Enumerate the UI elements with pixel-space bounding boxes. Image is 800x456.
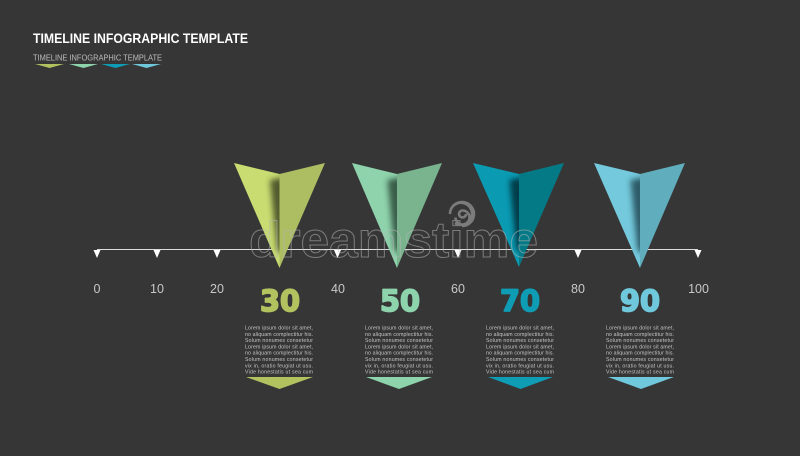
bottom arrow: [246, 377, 313, 389]
column: 70: [486, 284, 554, 389]
lorem text block: Lorem ipsum dolor sit amet,: [486, 326, 554, 332]
lorem text block: Solum nonumes consetetur: [486, 338, 554, 344]
lorem text block: no aliquam complectitur his.: [486, 332, 554, 338]
bottom arrow: [366, 377, 432, 389]
axis labels: 60: [451, 282, 465, 296]
axis labels: 100: [688, 282, 709, 296]
lorem text block: [245, 326, 313, 376]
big number 50: 50: [380, 284, 420, 318]
lorem text block: Vide honestatis ut sea cum: [606, 370, 674, 376]
lorem text block: Lorem ipsum dolor sit amet,: [606, 326, 674, 332]
bottom arrow: [488, 377, 553, 389]
lorem text block: Lorem ipsum dolor sit amet,: [486, 344, 554, 350]
lorem text block: Solum nonumes consetetur: [365, 338, 433, 344]
lorem text block: Solum nonumes consetetur: [365, 357, 433, 363]
lorem text block: Solum nonumes consetetur: [606, 357, 674, 363]
big number 90: 90: [620, 284, 660, 318]
lorem text block: vix in, oratio feugiat ut usu.: [245, 363, 313, 369]
axis labels: 40: [331, 282, 345, 296]
lorem text block: [365, 326, 433, 376]
title: TIMELINE INFOGRAPHIC TEMPLATE: [33, 31, 248, 46]
subtitle colour arrows: [35, 64, 161, 68]
axis labels: 10: [150, 282, 164, 296]
lorem text block: [606, 326, 674, 376]
lorem text block: Solum nonumes consetetur: [245, 357, 313, 363]
subtitle: TIMELINE INFOGRAPHIC TEMPLATE: [33, 52, 162, 62]
lorem text block: no aliquam complectitur his.: [606, 332, 674, 338]
paper plane marker: 50: [352, 163, 442, 268]
lorem text block: no aliquam complectitur his.: [606, 351, 674, 357]
lorem text block: Lorem ipsum dolor sit amet,: [245, 326, 313, 332]
lorem text block: no aliquam complectitur his.: [245, 351, 313, 357]
lorem text block: Vide honestatis ut sea cum: [365, 370, 433, 376]
paper plane marker: 90: [594, 163, 685, 268]
lorem text block: Solum nonumes consetetur: [245, 338, 313, 344]
lorem text block: Lorem ipsum dolor sit amet,: [245, 344, 313, 350]
big number 30: 30: [260, 284, 300, 318]
paper plane marker: 70: [473, 163, 564, 267]
watermark: dreamstime: [249, 212, 538, 268]
header: [33, 31, 248, 68]
lorem text block: no aliquam complectitur his.: [365, 332, 433, 338]
lorem text block: Lorem ipsum dolor sit amet,: [365, 326, 433, 332]
column: 50: [365, 284, 433, 389]
lorem text block: Lorem ipsum dolor sit amet,: [606, 344, 674, 350]
axis labels: [94, 282, 709, 296]
axis tick markers: [94, 250, 702, 258]
lorem text block: Lorem ipsum dolor sit amet,: [365, 344, 433, 350]
lorem text block: vix in, oratio feugiat ut usu.: [486, 363, 554, 369]
axis labels: 80: [571, 282, 585, 296]
big number 70: 70: [500, 284, 540, 318]
lorem text block: no aliquam complectitur his.: [245, 332, 313, 338]
lorem text block: vix in, oratio feugiat ut usu.: [365, 363, 433, 369]
bottom arrow: [608, 377, 674, 389]
column: 30: [245, 284, 313, 389]
lorem text block: vix in, oratio feugiat ut usu.: [606, 363, 674, 369]
lorem text block: Vide honestatis ut sea cum: [245, 370, 313, 376]
axis labels: 20: [210, 282, 224, 296]
lorem text block: Solum nonumes consetetur: [606, 338, 674, 344]
column: 90: [606, 284, 674, 389]
paper plane marker: 30: [234, 163, 325, 268]
lorem text block: no aliquam complectitur his.: [365, 351, 433, 357]
lorem text block: [486, 326, 554, 376]
lorem text block: no aliquam complectitur his.: [486, 351, 554, 357]
watermark spiral: [450, 202, 474, 226]
timeline axis: [94, 249, 709, 296]
axis labels: 0: [94, 282, 101, 296]
lorem text block: Vide honestatis ut sea cum: [486, 370, 554, 376]
lorem text block: Solum nonumes consetetur: [486, 357, 554, 363]
